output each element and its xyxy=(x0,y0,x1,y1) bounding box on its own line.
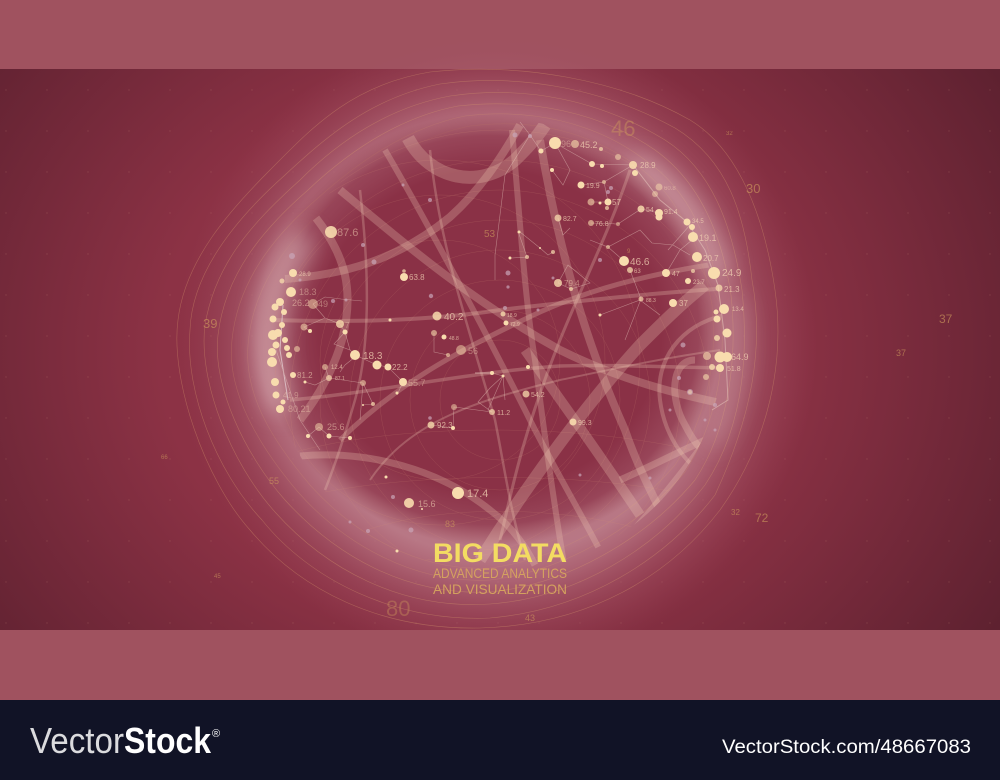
large background numbers: 37 xyxy=(939,312,953,326)
curved translucent bands xyxy=(270,125,730,570)
large background numbers xyxy=(161,116,953,623)
large background numbers: 45 xyxy=(214,574,221,580)
large background numbers: 32 xyxy=(731,508,740,517)
footer logo: Vector xyxy=(30,720,124,761)
node value labels: 12.4 xyxy=(331,365,343,371)
node value labels: 87.1 xyxy=(335,376,345,382)
node value labels: 18.9 xyxy=(507,313,517,319)
node value labels: 57 xyxy=(612,198,621,207)
node value labels: 56 xyxy=(468,346,478,356)
node value labels: 18.3 xyxy=(363,351,383,362)
dim lilac nodes xyxy=(289,132,717,533)
node value labels: 64.9 xyxy=(731,352,749,362)
node value labels: 37 xyxy=(679,299,688,308)
large background numbers: 83 xyxy=(445,519,455,529)
node value labels: 18.3 xyxy=(299,287,317,297)
large background numbers: 37 xyxy=(896,348,906,358)
rim highlights xyxy=(270,165,739,440)
right edge node cluster xyxy=(688,284,732,394)
node value labels: 47 xyxy=(672,271,680,278)
node value labels: 28.9 xyxy=(640,161,656,170)
node value labels: 80.21 xyxy=(288,404,311,414)
large background numbers: 66 xyxy=(161,455,168,461)
inner concentric grid lines xyxy=(285,130,711,560)
sphere outer halo xyxy=(177,25,817,665)
large background numbers: 53 xyxy=(484,229,496,240)
node value labels: 26.2 xyxy=(292,298,310,308)
large background numbers: 39 xyxy=(203,316,217,331)
node value labels: 51.8 xyxy=(727,366,741,373)
node value labels: 17.4 xyxy=(467,488,488,500)
node value labels: 34.5 xyxy=(692,219,704,225)
footer logo: Stock xyxy=(124,720,212,761)
subtitle: AND VISUALIZATION xyxy=(433,581,567,597)
node value labels: 54.2 xyxy=(531,392,545,399)
node value labels: 41.9 xyxy=(283,391,299,400)
node value labels: 55.7 xyxy=(408,378,426,388)
node value labels: 22.2 xyxy=(392,363,408,372)
background dot grid xyxy=(0,69,1000,630)
network connection lines xyxy=(276,122,728,450)
title: BIG DATA: BIG DATA xyxy=(433,538,567,568)
node value labels: 11.2 xyxy=(497,410,510,417)
node value labels: 24.9 xyxy=(722,268,742,279)
large background numbers: 43 xyxy=(525,613,535,623)
node value labels: 88.3 xyxy=(646,298,656,304)
footer image id: VectorStock.com/48667083 xyxy=(722,737,971,758)
large background numbers: 80 xyxy=(386,596,410,621)
node value labels: 21.3 xyxy=(724,285,740,294)
outer contour lines xyxy=(177,69,778,628)
upper right node arc xyxy=(538,137,720,316)
node value labels: 19.1 xyxy=(699,233,717,243)
footer logo xyxy=(30,720,220,761)
node value labels: 81.2 xyxy=(297,371,313,380)
node value labels: 40.2 xyxy=(444,312,464,323)
node value labels: 7 xyxy=(345,321,350,330)
bottom band xyxy=(0,630,1000,700)
large background numbers: 32 xyxy=(726,131,733,137)
node value labels: 49 xyxy=(318,299,328,309)
node value labels: 87.6 xyxy=(337,227,358,239)
main background panel xyxy=(0,69,1000,630)
subtitle: ADVANCED ANALYTICS xyxy=(433,565,567,581)
node value labels: 99.3 xyxy=(578,420,592,427)
node value labels: 19.9 xyxy=(586,183,600,190)
node value labels: 92.3 xyxy=(437,421,453,430)
node value labels: 45.2 xyxy=(580,140,598,150)
sphere dark core xyxy=(258,114,722,546)
central node cluster xyxy=(325,226,576,552)
large background numbers: 46 xyxy=(611,116,635,141)
node value labels: 28.9 xyxy=(299,272,311,278)
node value labels: 23.7 xyxy=(693,280,705,286)
top band xyxy=(0,0,1000,69)
left node cluster xyxy=(267,269,366,440)
large background numbers: 9 xyxy=(627,249,631,255)
node value labels: 60.8 xyxy=(664,186,676,192)
footer bar xyxy=(0,700,1000,780)
footer logo: ® xyxy=(212,728,220,740)
node value labels: 20.7 xyxy=(703,254,719,263)
node value labels: 15.6 xyxy=(418,499,436,509)
large background numbers: 55 xyxy=(269,476,279,486)
node value labels: 25.6 xyxy=(327,422,345,432)
node value labels: 96 xyxy=(561,139,571,149)
node value labels: 54 xyxy=(646,207,654,214)
node value labels xyxy=(283,139,749,509)
subtitle xyxy=(433,565,567,597)
node value labels: 79.4 xyxy=(564,279,580,288)
node value labels: 46.6 xyxy=(630,257,650,268)
node value labels: 63.8 xyxy=(409,273,425,282)
node value labels: 72.9 xyxy=(510,322,520,328)
node value labels: 48.8 xyxy=(449,336,459,342)
large background numbers: 72 xyxy=(755,511,769,525)
node value labels: 91.4 xyxy=(664,209,678,216)
large background numbers: 30 xyxy=(746,181,760,196)
node value labels: 13.4 xyxy=(732,307,744,313)
node value labels: 82.7 xyxy=(563,216,577,223)
node value labels: 76.8 xyxy=(595,221,609,228)
node value labels: 63 xyxy=(634,269,641,275)
